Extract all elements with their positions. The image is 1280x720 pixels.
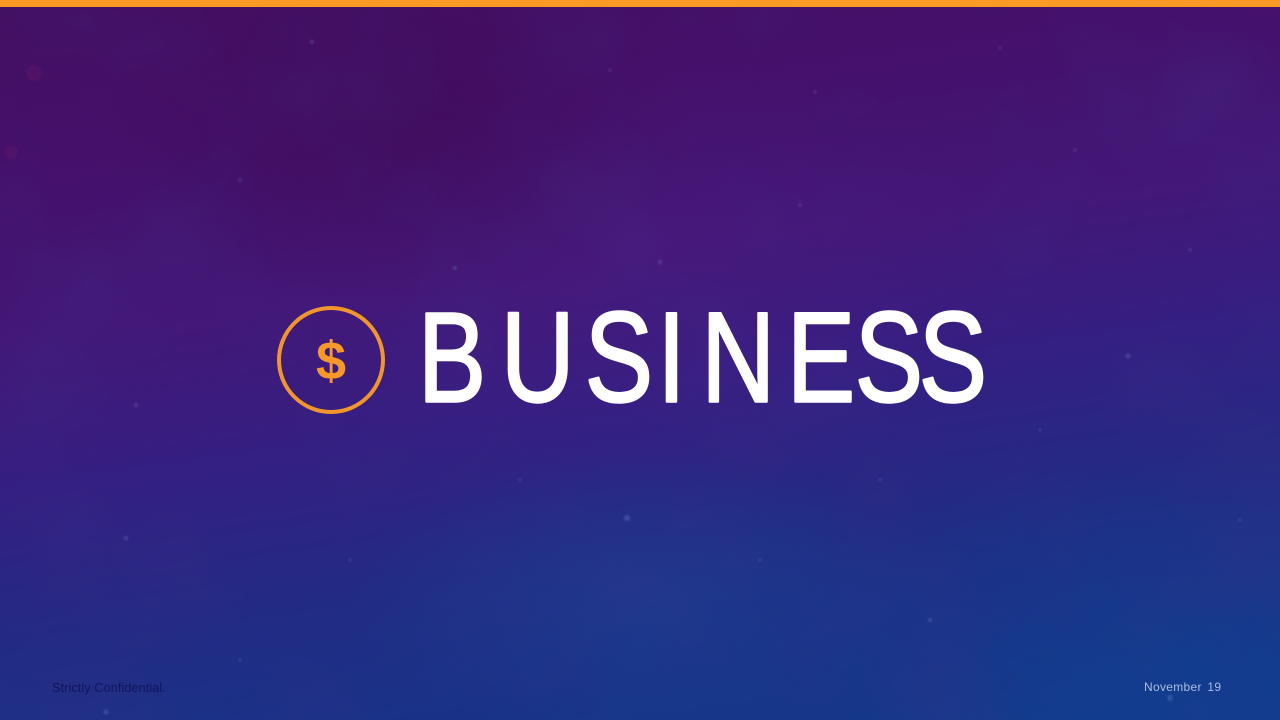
footer: date: November 19 [1144, 680, 1221, 694]
top orange bar [0, 0, 1280, 7]
icon: dollar coin: $ [316, 331, 346, 391]
footer: confidentiality note: Strictly Confidential. [52, 681, 166, 695]
title: BUSINESS [418, 286, 987, 429]
